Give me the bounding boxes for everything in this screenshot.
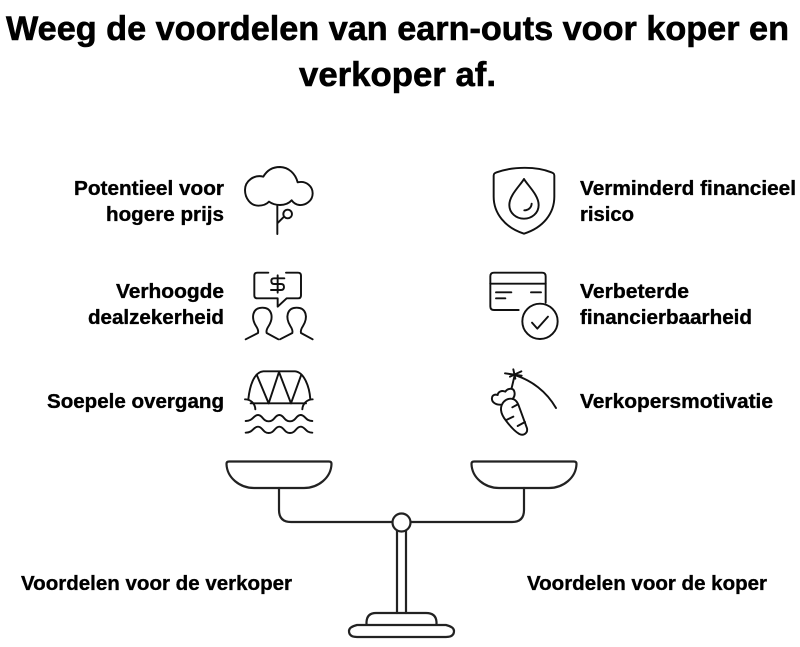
- title: [6, 10, 789, 94]
- beam: [279, 488, 524, 522]
- base: [349, 613, 454, 637]
- label: verminderd financieel risico: risico: [580, 204, 634, 226]
- icon: carrot on a stick: [492, 369, 556, 435]
- label: soepele overgang: Soepele overgang: [47, 391, 224, 413]
- label: potentieel voor hogere prijs: hogere prijs: [106, 204, 224, 226]
- label: verbeterde financierbaarheid: Verbeterde: [580, 281, 689, 303]
- caption: voordelen voor de verkoper: Voordelen voor de verkoper: [21, 573, 292, 595]
- label: verhoogde dealzekerheid: [88, 281, 224, 329]
- label: potentieel voor hogere prijs: [74, 178, 224, 226]
- caption: voordelen voor de koper: Voordelen voor de koper: [527, 573, 767, 595]
- label: verkopersmotivatie: Verkopersmotivatie: [580, 391, 773, 413]
- icon: tree cloud: [245, 167, 313, 234]
- pivot: [392, 514, 410, 532]
- right pan: [472, 462, 576, 488]
- icon: bridge over water: [245, 371, 313, 433]
- icon: credit card with check: [490, 273, 558, 339]
- label: verminderd financieel risico: [580, 178, 796, 226]
- label: verhoogde dealzekerheid: dealzekerheid: [88, 307, 224, 329]
- stem: [397, 531, 406, 613]
- label: verbeterde financierbaarheid: [580, 281, 752, 329]
- balance scale: [226, 462, 576, 637]
- label: potentieel voor hogere prijs: Potentieel voor: [74, 178, 224, 200]
- left pan: [226, 462, 332, 488]
- label: verhoogde dealzekerheid: Verhoogde: [116, 281, 224, 303]
- title: Weeg de voordelen van earn-outs voor koper en: [6, 10, 789, 48]
- label: verbeterde financierbaarheid: financierbaarheid: [580, 307, 752, 329]
- icon: shield with drop: [494, 168, 554, 234]
- icon: speech bubble and people: [246, 273, 313, 339]
- title: verkoper af.: [299, 56, 496, 94]
- label: verminderd financieel risico: Verminderd financieel: [580, 178, 796, 200]
